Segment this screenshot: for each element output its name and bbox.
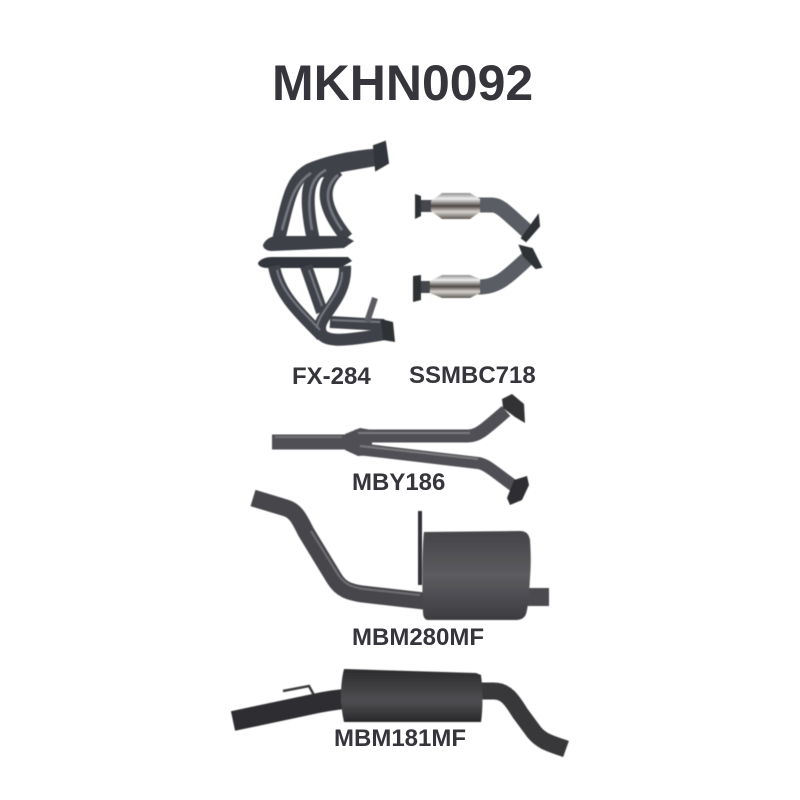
- lower inlet neck: [418, 281, 440, 293]
- mounting plate: [418, 511, 422, 585]
- image: FX-284 extractors: [258, 142, 395, 342]
- upper inlet neck: [418, 200, 442, 212]
- label: MBM181MF: MBM181MF: [334, 725, 466, 752]
- upper extractor highlights: [282, 170, 342, 230]
- image: MBM280MF muffler: [253, 498, 549, 620]
- junction: [345, 428, 372, 456]
- outlet pipe: [478, 691, 566, 749]
- branches: [355, 411, 506, 436]
- image: SSMBC718 catalytic converters: [413, 193, 541, 302]
- sensor bung: [367, 298, 375, 322]
- upper collector flange: [374, 142, 388, 170]
- upper converter pipe: [476, 205, 527, 231]
- upper outlet flange: [522, 216, 539, 241]
- upper converter body: [431, 193, 480, 219]
- outlet stub: [520, 588, 549, 606]
- image: MBY186 Y-pipe: [272, 394, 529, 505]
- pipe highlight: [311, 531, 420, 595]
- inlet pipe: [272, 434, 345, 450]
- lower extractor pipes: [274, 266, 385, 340]
- tail pipe: [253, 498, 424, 601]
- upper extractor pipes: [279, 155, 378, 238]
- upper inlet flange: [415, 194, 421, 219]
- label: FX-284: FX-284: [292, 363, 371, 390]
- lower inlet flange: [413, 275, 421, 302]
- lower converter body: [430, 275, 480, 298]
- hanger: [283, 686, 315, 697]
- label: MBY186: MBY186: [352, 469, 445, 496]
- inlet pipe: [233, 699, 345, 721]
- lower flange: [507, 476, 529, 505]
- muffler body: [422, 531, 531, 620]
- title: MKHN0092: [272, 55, 533, 111]
- upper collector band: [310, 150, 376, 178]
- label: MBM280MF: MBM280MF: [352, 624, 484, 651]
- upper mounting flange: [263, 236, 354, 251]
- image: MBM181MF muffler: [233, 669, 566, 749]
- lower converter pipe: [478, 258, 528, 287]
- lower outlet flange: [520, 246, 541, 268]
- lower collector flange: [381, 319, 395, 342]
- lower extractor highlights: [277, 270, 380, 330]
- upper flange: [502, 394, 525, 423]
- branch highlights: [358, 432, 470, 434]
- lower mounting flange: [258, 257, 352, 268]
- label: SSMBC718: SSMBC718: [409, 362, 536, 389]
- muffler body: [341, 669, 482, 722]
